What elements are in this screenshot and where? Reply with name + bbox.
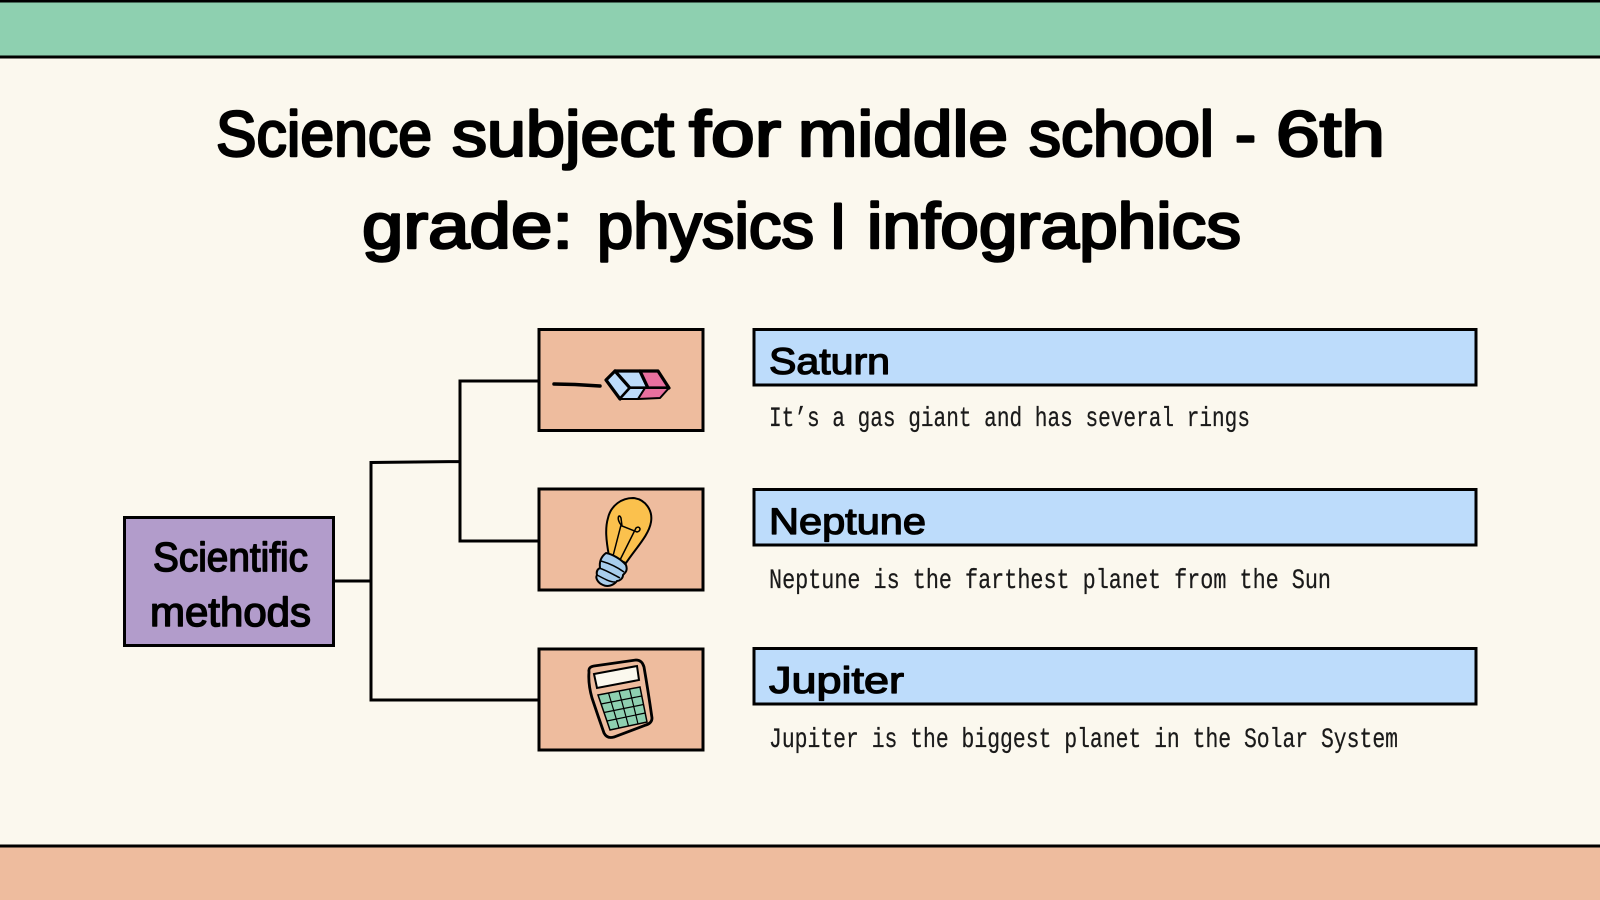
row: Neptune: Neptune — [769, 501, 926, 542]
row: Saturn — [754, 330, 1476, 435]
row: Neptune: Neptune is the farthest planet from the Sun — [769, 566, 1331, 597]
row: Neptune — [754, 490, 1476, 597]
title: middle — [798, 98, 1008, 170]
row: Jupiter: Jupiter — [769, 660, 904, 701]
row: Jupiter: Jupiter is the biggest planet in the Solar System — [769, 725, 1398, 756]
title: subject — [452, 98, 674, 170]
title: for — [689, 98, 781, 170]
panel: scientific methods — [124, 518, 334, 646]
title: - — [1235, 98, 1256, 170]
top band — [0, 1, 1600, 57]
title: I — [830, 190, 846, 262]
row: Saturn: Saturn — [769, 341, 890, 382]
title: physics — [597, 190, 814, 262]
title: infographics — [867, 190, 1241, 262]
bottom band — [0, 846, 1600, 900]
title: grade: — [362, 190, 573, 262]
row: Saturn: It’s a gas giant and has several rings — [769, 404, 1250, 435]
icon panel: calculator — [539, 649, 703, 750]
icon panel: light bulb — [539, 489, 703, 590]
title — [216, 98, 1385, 262]
icon panel: eraser — [539, 330, 703, 430]
title: 6th — [1276, 98, 1385, 170]
title: Science — [216, 98, 432, 170]
title: school — [1029, 98, 1214, 170]
panel: scientific methods: Scientific — [153, 534, 308, 580]
row: Jupiter — [754, 648, 1476, 756]
panel: scientific methods: methods — [150, 589, 311, 635]
connector lines — [334, 381, 538, 700]
